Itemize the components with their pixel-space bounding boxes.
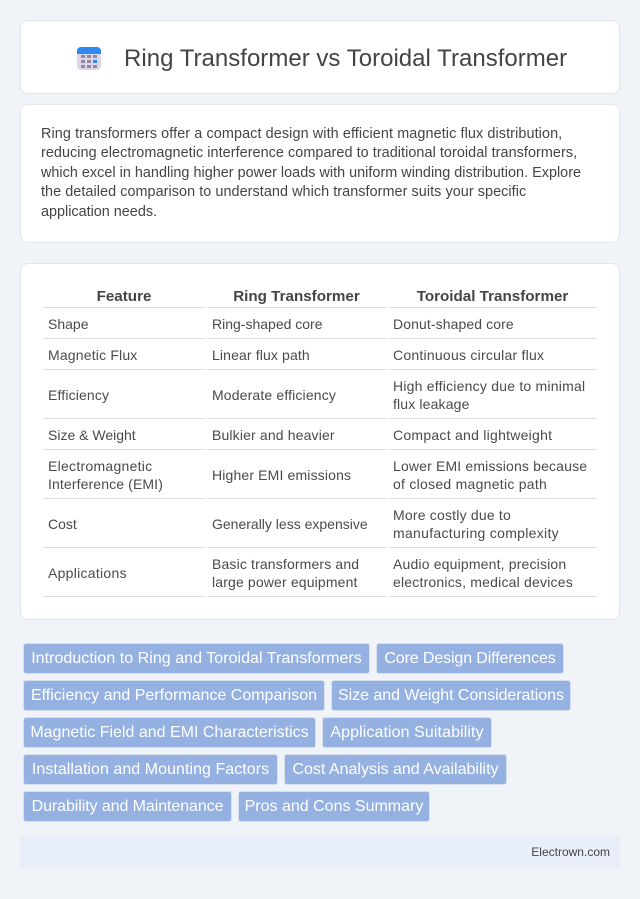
panel: introduction [20, 104, 620, 243]
intro text: reducing electromagnetic interference compared to traditional toroidal transformers, [41, 145, 577, 161]
topic tags: Pros and Cons Summary [245, 798, 423, 815]
comparison table: Donut-shaped core [393, 316, 514, 332]
title card [20, 20, 620, 94]
topic tags: Cost Analysis and Availability [292, 761, 499, 778]
comparison table: Electromagnetic [48, 458, 152, 474]
comparison table: large power equipment [212, 574, 358, 590]
panel: comparison table [20, 263, 620, 620]
topic tags: Introduction to Ring and Toroidal Transformers [31, 650, 362, 667]
topic tags: Efficiency and Performance Comparison [31, 687, 317, 704]
comparison table: Continuous circular flux [393, 347, 544, 363]
comparison table: Applications [48, 565, 127, 581]
topic tags: Installation and Mounting Factors [32, 761, 269, 778]
comparison table: Toroidal Transformer [417, 288, 568, 305]
topic tags [23, 643, 571, 822]
icon: calendar grid [77, 47, 101, 70]
comparison table [43, 288, 597, 597]
topic tags: Durability and Maintenance [32, 798, 223, 815]
comparison table: Feature [97, 288, 151, 305]
comparison table: Bulkier and heavier [212, 427, 335, 443]
comparison table: manufacturing complexity [393, 525, 559, 541]
comparison table: Basic transformers and [212, 556, 359, 572]
intro text: application needs. [41, 204, 157, 220]
intro text [41, 126, 581, 220]
comparison table: Audio equipment, precision [393, 556, 566, 572]
topic tags: Application Suitability [330, 724, 484, 741]
intro text: Ring transformers offer a compact design with efficient magnetic flux distribution, [41, 126, 562, 142]
comparison table: Shape [48, 316, 88, 332]
comparison table: Higher EMI emissions [212, 467, 351, 483]
footer credit: Electrown.com [531, 845, 610, 859]
topic tags: Core Design Differences [384, 650, 556, 667]
comparison table: Cost [48, 516, 77, 532]
comparison table: Compact and lightweight [393, 427, 552, 443]
title: Ring Transformer vs Toroidal Transformer [124, 45, 567, 72]
topic tags: Size and Weight Considerations [338, 687, 564, 704]
comparison table: Magnetic Flux [48, 347, 138, 363]
comparison table: Lower EMI emissions because [393, 458, 587, 474]
comparison table: electronics, medical devices [393, 574, 573, 590]
intro text: which excel in handling higher power loads with uniform winding distribution. Explore [41, 165, 581, 181]
intro text: the detailed comparison to understand which transformer suits your specific [41, 184, 526, 200]
comparison table: Interference (EMI) [48, 476, 163, 492]
comparison table: flux leakage [393, 396, 470, 412]
comparison table: of closed magnetic path [393, 476, 547, 492]
comparison table: More costly due to [393, 507, 511, 523]
comparison table: Ring Transformer [233, 288, 360, 305]
comparison table: Efficiency [48, 387, 109, 403]
comparison table: Moderate efficiency [212, 387, 336, 403]
comparison table: Linear flux path [212, 347, 310, 363]
footer [20, 835, 620, 869]
comparison table: Generally less expensive [212, 516, 368, 532]
topic tags: Magnetic Field and EMI Characteristics [30, 724, 309, 741]
comparison table: High efficiency due to minimal [393, 378, 585, 394]
comparison table: Ring-shaped core [212, 316, 323, 332]
comparison table: Size & Weight [48, 427, 136, 443]
